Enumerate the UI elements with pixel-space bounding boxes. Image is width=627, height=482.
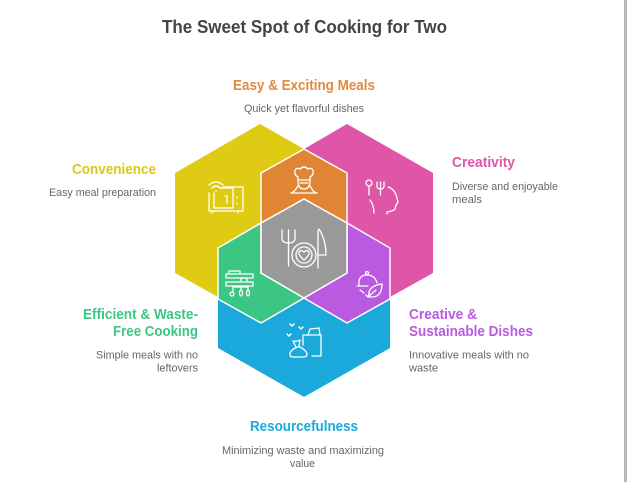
icon: chef: [291, 167, 317, 193]
label: creativity: Creativity: [452, 155, 515, 171]
label: convenience: [49, 162, 156, 199]
segment: creative sustainable purple: [304, 223, 390, 323]
segment: center grey: [261, 199, 347, 298]
label: resourcefulness: Resourcefulness: [250, 419, 358, 435]
label: creative and sustainable dishes: [408, 307, 533, 374]
label: resourcefulness: [222, 419, 384, 470]
label: creative and sustainable dishes: Innovative meals with no: [409, 350, 529, 362]
segment: convenience yellow: [175, 124, 304, 297]
segment: creativity pink: [304, 124, 433, 297]
segment: easy and exciting orange: [261, 149, 347, 223]
title: The Sweet Spot of Cooking for Two: [162, 17, 447, 37]
label: efficient and waste-free cooking: leftovers: [157, 362, 198, 374]
label: resourcefulness: value: [290, 458, 315, 470]
icon: fork plate knife with heart: [282, 229, 326, 268]
icon: utensils and head: [366, 180, 398, 214]
label: creative and sustainable dishes: waste: [408, 362, 438, 374]
icon: wifi microwave: [209, 182, 243, 213]
right edge bar: [624, 0, 627, 482]
label: creativity: Diverse and enjoyable: [452, 181, 558, 193]
label: efficient and waste-free cooking: [83, 307, 198, 374]
label: creativity: [452, 155, 558, 206]
label: convenience: Easy meal preparation: [49, 187, 156, 199]
icon: bag and cup with hearts: [287, 324, 321, 357]
hexagon diagram: [175, 124, 433, 397]
label: creative and sustainable dishes: Creative &: [409, 307, 477, 323]
label: resourcefulness: Minimizing waste and maximizing: [222, 445, 384, 457]
label: convenience: Convenience: [72, 162, 156, 178]
label: easy and exciting meals: Easy & Exciting Meals: [233, 78, 375, 94]
segment: efficient green: [218, 223, 304, 323]
label: easy and exciting meals: [233, 78, 375, 115]
icon: shelves with utensils: [226, 271, 253, 296]
label: efficient and waste-free cooking: Simple meals with no: [96, 350, 198, 362]
segment: resourcefulness blue: [218, 298, 390, 397]
label: creativity: meals: [452, 194, 483, 206]
label: efficient and waste-free cooking: Free Cooking: [113, 324, 198, 340]
icon: cloche and leaf: [357, 272, 382, 297]
label: easy and exciting meals: Quick yet flavorful dishes: [244, 103, 364, 115]
label: creative and sustainable dishes: Sustainable Dishes: [409, 324, 533, 340]
label: efficient and waste-free cooking: Efficient & Waste-: [83, 307, 198, 323]
